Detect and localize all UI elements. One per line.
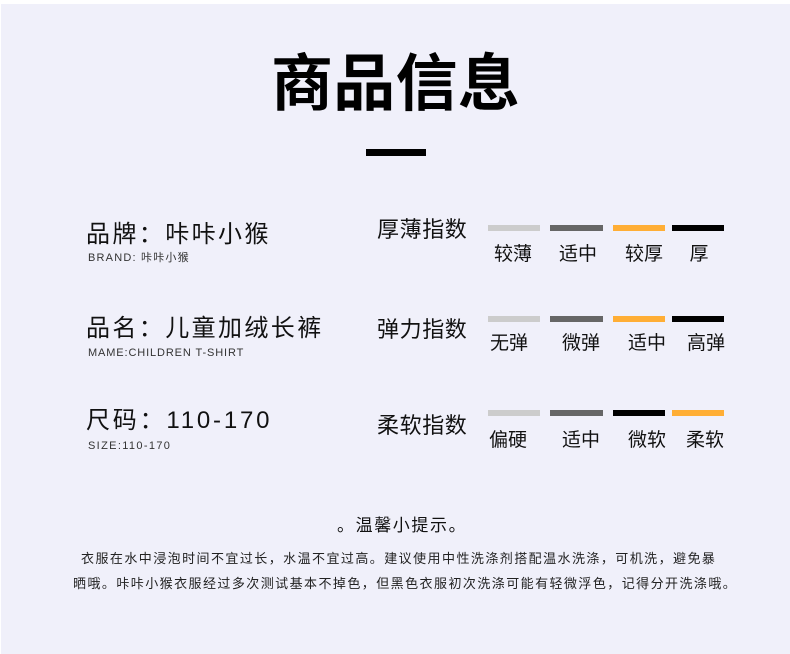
elasticity scale labels: 高弹 — [687, 333, 725, 354]
brand subtitle: BRAND: 咔咔小猴 — [88, 252, 190, 264]
elasticity scale bars — [488, 316, 724, 322]
elasticity scale labels — [490, 333, 725, 354]
elasticity scale labels: 无弹 — [490, 333, 528, 354]
size subtitle: SIZE:110-170 — [88, 440, 171, 452]
brand heading: 品牌：咔咔小猴 — [86, 221, 271, 248]
thickness label: 厚薄指数 — [377, 217, 467, 242]
tips body text: 衣服在水中浸泡时间不宜过长，水温不宜过高。建议使用中性洗涤剂搭配温水洗涤，可机洗，避免暴 — [81, 551, 716, 566]
thickness scale labels: 较薄 — [494, 244, 532, 265]
softness index row — [377, 410, 724, 451]
thickness index row — [377, 217, 724, 265]
title: 商品信息 — [271, 50, 520, 119]
size heading: 尺码：110-170 — [86, 407, 272, 434]
brand text block — [86, 221, 271, 264]
softness label: 柔软指数 — [377, 413, 467, 438]
product name heading: 品名：儿童加绒长裤 — [86, 315, 324, 342]
tips body text: 晒哦。咔咔小猴衣服经过多次测试基本不掉色，但黑色衣服初次洗涤可能有轻微浮色，记得分开洗涤哦。 — [73, 576, 737, 591]
tips body text — [73, 551, 737, 591]
elasticity scale labels: 微弹 — [562, 333, 600, 354]
softness scale labels — [489, 430, 724, 451]
product name subtitle: MAME:CHILDREN T-SHIRT — [88, 347, 244, 359]
elasticity index row — [377, 316, 725, 354]
thickness scale labels: 厚 — [689, 244, 708, 265]
softness scale labels: 偏硬 — [489, 430, 527, 451]
thickness scale bars — [488, 225, 724, 231]
softness scale bars — [488, 410, 724, 416]
thickness scale labels: 适中 — [559, 244, 597, 265]
elasticity label: 弹力指数 — [377, 317, 467, 342]
thickness scale labels: 较厚 — [625, 244, 663, 265]
softness scale labels: 适中 — [562, 430, 600, 451]
tips heading: 。温馨小提示。 — [337, 516, 467, 535]
softness scale labels: 柔软 — [686, 430, 724, 451]
size text block — [86, 407, 272, 452]
product name text block — [86, 315, 324, 359]
softness scale labels: 微软 — [628, 430, 666, 451]
title underline — [366, 149, 426, 156]
thickness scale labels — [494, 244, 708, 265]
elasticity scale labels: 适中 — [628, 333, 666, 354]
